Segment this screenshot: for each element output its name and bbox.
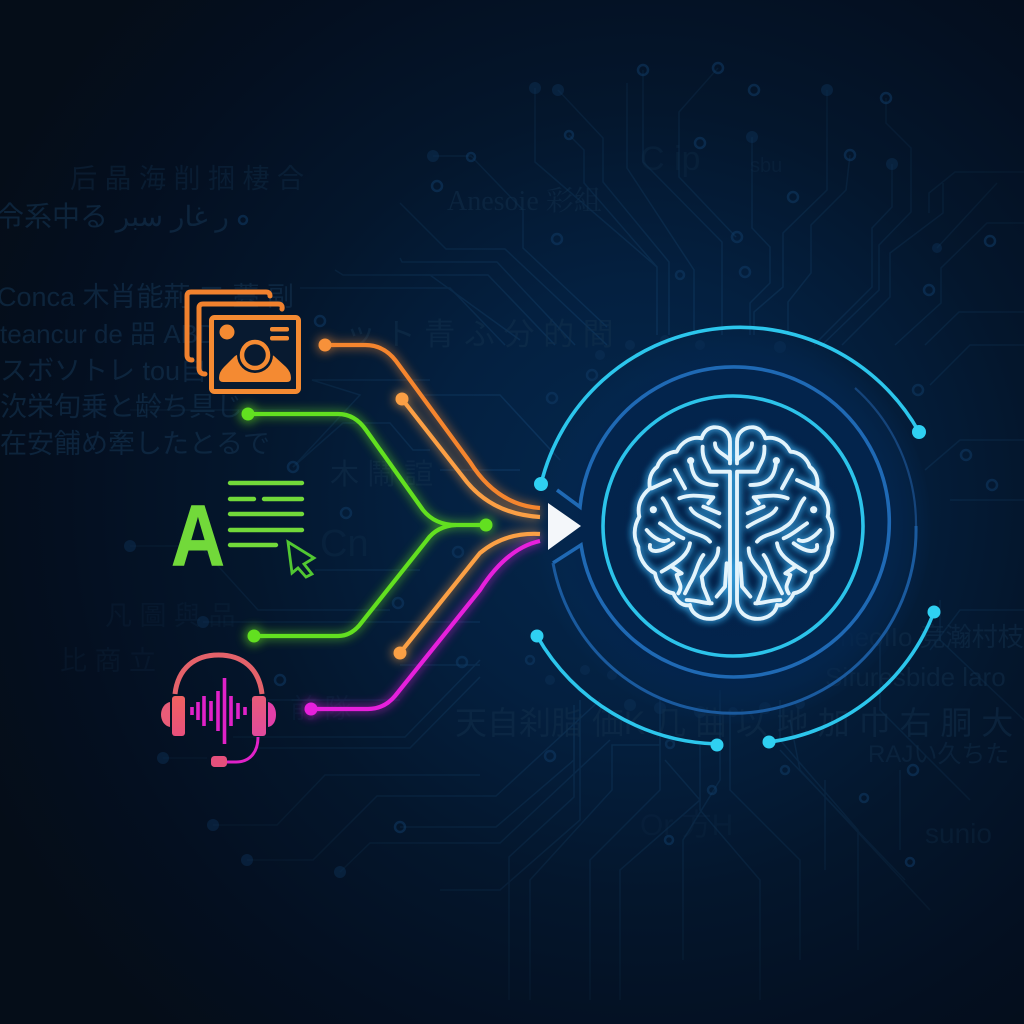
third ring upper fade [855,388,916,526]
faint multilingual background text: スボソトレ tou自 岂 [0,356,242,386]
faint multilingual background text: ッ ト 青 ふ 分 的 間 [345,317,614,352]
brain right hemisphere [737,427,832,619]
faint multilingual background text: 在安餔め牽したとるで [0,429,270,459]
faint multilingual background text: Sifuresbide laro [825,662,1006,692]
text lines [230,483,302,545]
middle ring with chevron ticks [553,367,889,677]
faint multilingual background text: 凡 圖 與 品 [105,601,236,631]
cursor [288,542,314,577]
ring system [530,327,940,752]
faint multilingual background text: sbu [750,155,782,177]
outer arc with end dots [534,327,926,491]
faint multilingual background text: 㳄栄旬乗と龄ち具じ [0,392,243,422]
faint multilingual background text [0,140,1024,849]
faint multilingual background text: 令系中る ر غار سبر [0,201,229,233]
third ring [553,526,916,713]
connector: lower orange input [394,534,540,660]
connector: green text inputs [242,408,492,642]
faint multilingual background text: ccumneoIIo 竞瀚村枝 [778,622,1024,652]
faint multilingual background text: 木 鬧 諠 [330,458,433,491]
background solid nodes [124,82,942,878]
connector: audio input [304,541,540,716]
faint multilingual background text: Cn [320,523,369,565]
faint multilingual background text: 前 隊 [290,694,352,724]
microphone boom [226,737,258,762]
letter A: A [171,487,225,583]
icon: image stack [187,292,298,392]
faint multilingual background text: teancur de 㗊 ABDoor [0,319,255,349]
icon: headset with waveform [161,655,276,767]
connector glow layer [239,337,540,717]
headband [175,655,262,694]
faint multilingual background text: Conca 木肖能荊 二 薹 副 [0,282,294,312]
brain left hemisphere [635,427,730,619]
icon: brain [635,427,832,619]
faint multilingual background text: sunio [925,818,992,849]
lower left arc with end dots [530,630,724,752]
connector: second photo input [396,392,540,517]
background circuit nodes [239,63,997,866]
faint multilingual background text: 比 商 立 [60,646,156,676]
faint multilingual background text: 后 晶 海 削 捆 棲 合 [70,164,304,194]
ear cups [161,696,276,736]
connector: photo input [318,338,540,508]
faint multilingual background text: C ip [640,140,700,178]
background circuit traces [130,68,1024,1000]
inner ring [603,396,863,656]
ring backdrop [535,328,931,724]
icon: text document with cursor [171,483,314,583]
lower right arc with end dots [762,606,940,748]
microphone [211,756,227,767]
faint multilingual background text: RAJい久ちた [868,741,1009,768]
faint multilingual background text: Anesoie 彩組 [447,185,602,217]
audio waveform [192,678,245,744]
faint multilingual background text: Or 方H [640,809,733,842]
icon: play arrow [548,503,581,550]
